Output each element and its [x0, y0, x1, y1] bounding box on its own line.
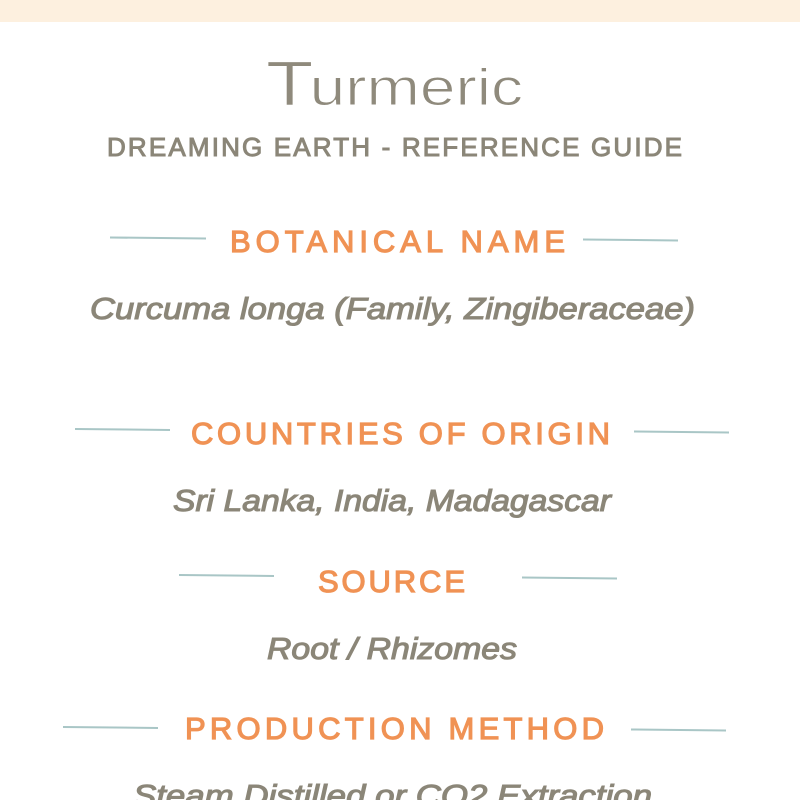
heading: botanical name: BOTANICAL NAME [230, 224, 565, 259]
text: botanical name value: Curcuma longa (Family, Zingiberaceae) [90, 291, 695, 326]
text: source value: Root / Rhizomes [267, 631, 517, 666]
subtitle: DREAMING EARTH - REFERENCE GUIDE [107, 132, 682, 162]
top banner [0, 0, 800, 22]
heading: countries of origin: COUNTRIES OF ORIGIN [191, 416, 610, 451]
panel: botanical name [90, 224, 695, 326]
panel: countries of origin [75, 416, 729, 518]
heading: source: SOURCE [318, 564, 465, 599]
title: Turmeric [266, 49, 523, 119]
heading: production method: PRODUCTION METHOD [185, 711, 604, 746]
panel: production method [63, 711, 726, 800]
text: countries value: Sri Lanka, India, Madagascar [173, 483, 613, 518]
panel: source [179, 564, 617, 666]
